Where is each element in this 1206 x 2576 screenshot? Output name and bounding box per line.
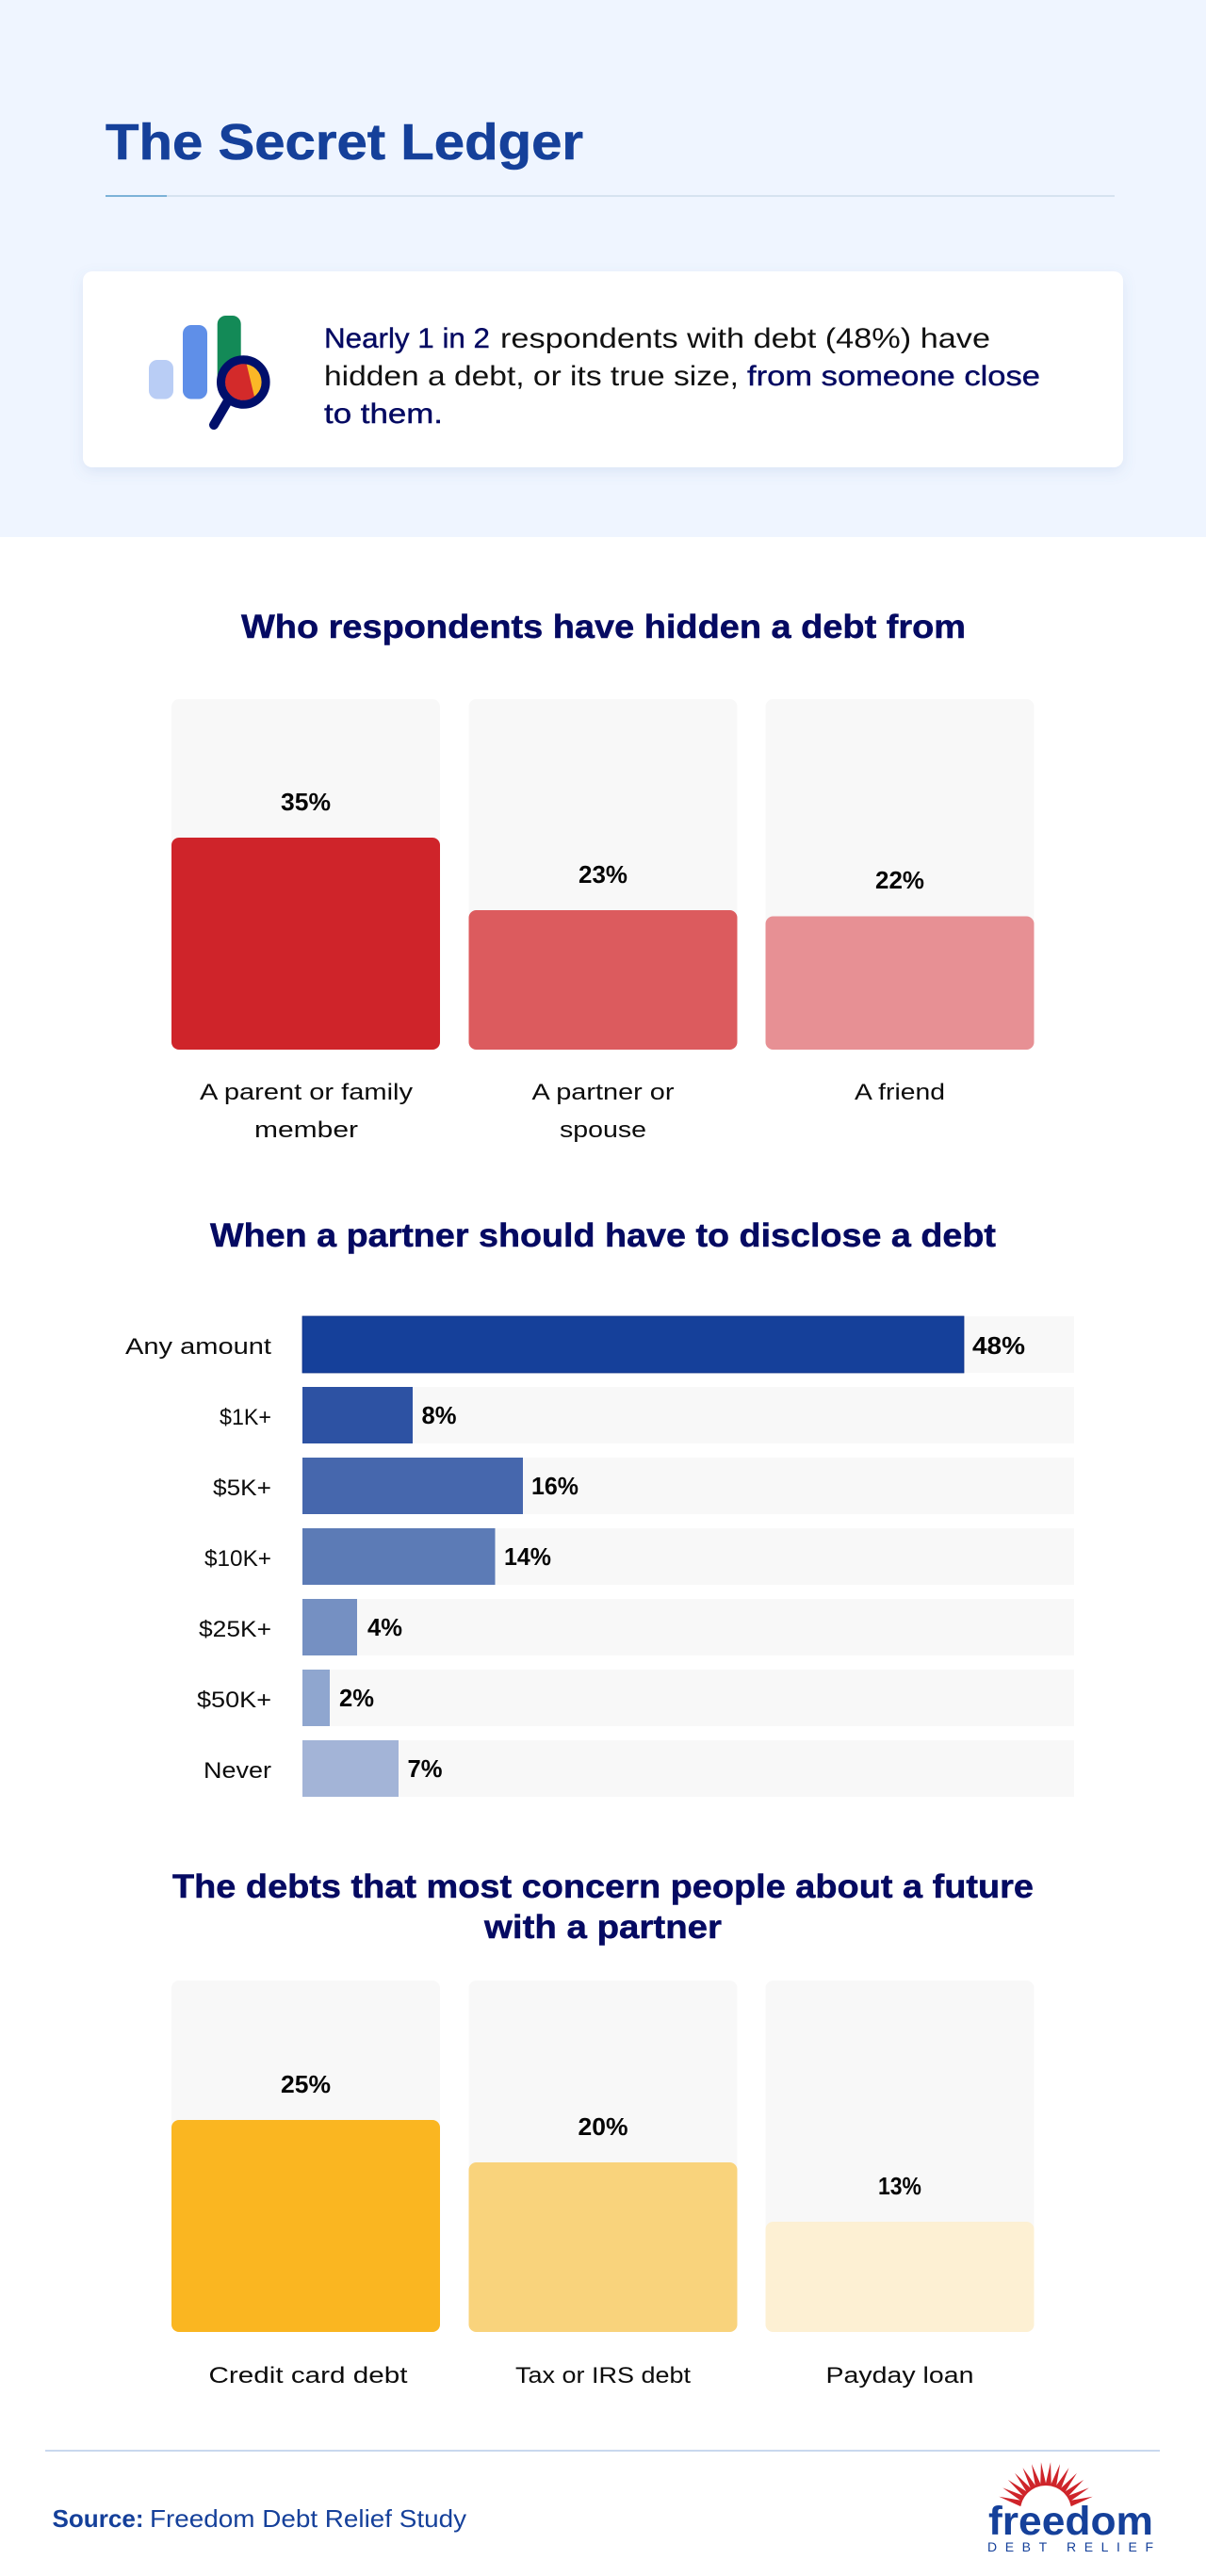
row: never [204,1740,1074,1797]
heading: debts that most concern people: with a partner [483,1909,722,1946]
row: $25K+: $25K+ [199,1617,271,1642]
callout text: respondents with debt (48%) have [500,323,990,354]
panel: concerning debts chart [171,1981,1035,2389]
column: credit card debt: 25% [281,2070,331,2098]
source note: Source: [53,2504,143,2533]
heading: when a partner should disclose: When a partner should have to disclose a debt [210,1217,996,1254]
logo: freedom debt relief: freedom [988,2499,1153,2544]
heading: debts that most concern people [172,1868,1034,1946]
row: never: 7% [407,1754,443,1783]
row: $5K+: 16% [531,1472,579,1500]
logo: freedom debt relief [987,2462,1153,2554]
callout text: to them. [324,399,443,430]
row: $10K+: 14% [504,1542,551,1571]
panel: header [0,0,1206,537]
column: parent or family member: 35% [281,788,331,816]
column: friend: A friend [855,1080,945,1105]
panel: disclosure horizontal bar chart [125,1316,1074,1797]
panel: hidden from chart [171,699,1035,1143]
column: partner or spouse: 23% [579,860,627,889]
column: friend [765,699,1035,1105]
row: $5K+: $5K+ [213,1475,271,1501]
column: parent or family member [171,699,440,1143]
column: tax or IRS debt: 20% [579,2112,627,2141]
column: tax or IRS debt: Tax or IRS debt [515,2363,691,2389]
row: any amount: 48% [972,1331,1025,1360]
column: payday loan: Payday loan [825,2363,974,2389]
source note: Freedom Debt Relief Study [150,2504,466,2533]
row: $1K+ [220,1387,1074,1443]
row: $10K+ [204,1528,1074,1585]
title: The Secret Ledger [106,114,583,171]
icon: bar chart with magnifying glass [149,316,266,425]
row: any amount: Any amount [125,1334,271,1360]
row: never: Never [204,1758,271,1784]
callout text: hidden a debt, or its true size, [324,361,739,392]
column: tax or IRS debt [469,1981,737,2389]
logo: freedom debt relief: DEBT RELIEF [987,2539,1153,2554]
row: $50K+: $50K+ [197,1687,271,1713]
column: friend: 22% [875,866,924,894]
column: payday loan [765,1981,1035,2389]
row: $10K+: $10K+ [204,1546,271,1572]
heading: debts that most concern people: The debts that most concern people about a future [172,1868,1034,1905]
callout text [324,323,1040,430]
callout text: Nearly 1 in 2 [324,323,490,354]
column: partner or spouse: spouse [560,1117,646,1143]
row: $5K+ [213,1458,1074,1514]
column: partner or spouse: A partner or [531,1080,675,1105]
row: $1K+: 8% [422,1401,456,1429]
heading: who respondents have hidden a debt from: Who respondents have hidden a debt from [241,609,966,645]
icon: red sunburst [998,2462,1094,2506]
column: parent or family member: member [254,1117,358,1143]
callout text: from someone close [747,361,1040,392]
column: partner or spouse [469,699,737,1143]
row: $50K+ [197,1670,1074,1726]
callout card [83,271,1123,467]
row: any amount [125,1316,1074,1373]
row: $25K+ [199,1599,1074,1655]
column: credit card debt: Credit card debt [209,2363,408,2389]
column: payday loan: 13% [878,2172,921,2200]
row: $50K+: 2% [339,1684,374,1712]
column: parent or family member: A parent or family [200,1080,414,1105]
column: credit card debt [171,1981,440,2389]
row: $1K+: $1K+ [220,1405,271,1430]
row: $25K+: 4% [367,1613,402,1641]
